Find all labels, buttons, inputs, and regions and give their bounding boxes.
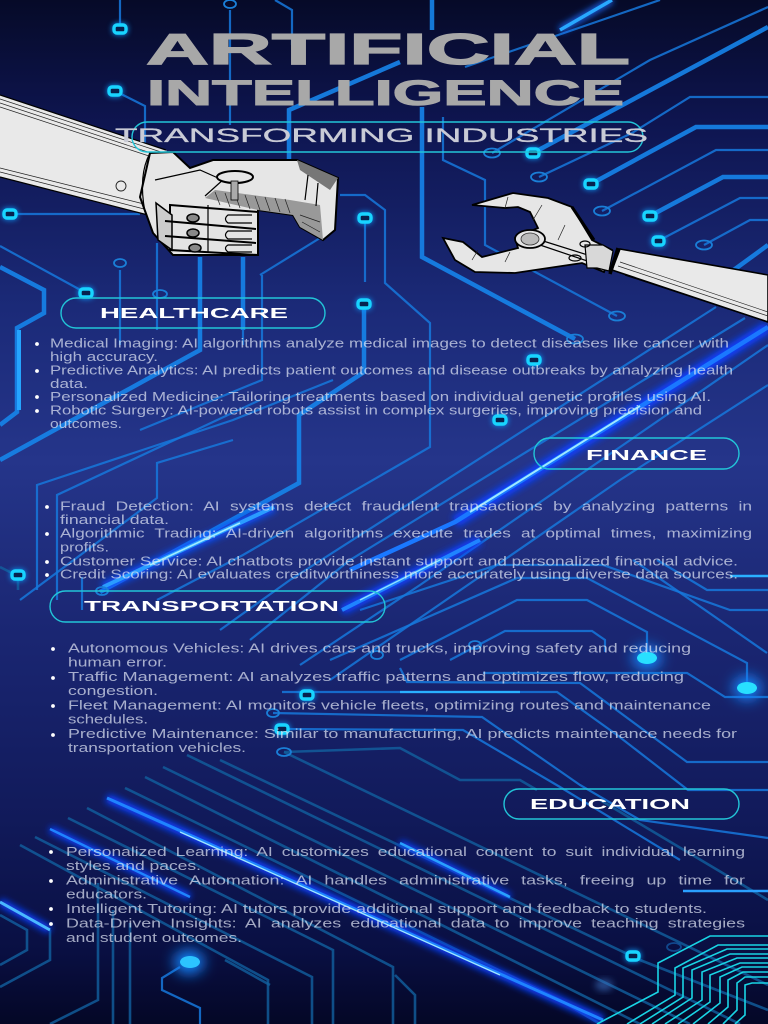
text block: transportation bullets: Fleet Management: AI monitors vehicle fleets, optimizing routes and maintenance [68, 698, 711, 712]
right gripper [443, 193, 612, 273]
text block: healthcare bullets: Robotic Surgery: AI-powered robots assist in complex surgeries, improving precision and [50, 404, 702, 418]
heading: finance [534, 438, 739, 469]
upper right fan [533, 27, 768, 153]
text block: education bullets: and student outcomes. [66, 931, 242, 945]
left hand palm and thumb [140, 152, 338, 255]
lower right diagonals [220, 307, 716, 630]
heading: finance: FINANCE [586, 447, 707, 464]
left hand finger segments [170, 205, 258, 255]
left hand pivot [217, 171, 253, 183]
subtitle pill [115, 122, 648, 152]
text block: education bullets [49, 845, 745, 945]
text block: healthcare bullets [35, 336, 733, 431]
text block: transportation bullets: Traffic Management: AI analyzes traffic patterns and optimizes flow, reducing [68, 670, 684, 684]
circuit corner: cyan lines [597, 936, 768, 1024]
text block: transportation bullets [51, 642, 737, 755]
text block: finance bullets [45, 500, 752, 582]
heading: education: EDUCATION [530, 796, 690, 813]
text block: healthcare bullets: high accuracy. [50, 350, 158, 364]
text block: transportation bullets: Predictive Maintenance: Similar to manufacturing, AI predicts maintenance needs for [68, 727, 737, 741]
text block: transportation bullets: congestion. [68, 684, 158, 698]
title: line 2: INTELLIGENCE [147, 74, 624, 113]
robot arm: right [443, 193, 768, 322]
lower left parallel diagonals [20, 845, 268, 1024]
text block: education bullets: educators. [66, 888, 147, 902]
heading: healthcare [61, 298, 325, 328]
heading: healthcare: HEALTHCARE [100, 305, 288, 322]
text block: healthcare bullets: outcomes. [50, 417, 122, 431]
text block: healthcare bullets: Predictive Analytics: AI predicts patient outcomes and disease outbreaks by analyzing health [50, 364, 733, 378]
subtitle text: TRANSFORMING INDUSTRIES [115, 125, 648, 147]
text block: transportation bullets: Autonomous Vehicles: AI drives cars and trucks, improving safety and reducing [68, 642, 691, 656]
text block: finance bullets: Customer Service: AI chatbots provide instant support and personalized financial advice. [60, 554, 738, 568]
text block: finance bullets: profits. [60, 540, 109, 554]
title: line 1: ARTIFICIAL [146, 25, 630, 74]
right gripper pivot [515, 230, 545, 248]
text block: education bullets: Intelligent Tutoring: AI tutors provide additional support and feedback to students. [66, 902, 707, 916]
title [146, 25, 630, 113]
heading: education [504, 789, 739, 819]
text block: education bullets: styles and paces. [66, 859, 201, 873]
text block: finance bullets: Credit Scoring: AI evaluates creditworthiness more accurately using diverse data sources. [60, 568, 738, 582]
text block: finance bullets: Algorithmic Trading: AI-driven algorithms execute trades at optimal times, maximizing [60, 526, 752, 540]
heading: transportation: TRANSPORTATION [84, 598, 339, 615]
text block: healthcare bullets: Medical Imaging: AI algorithms analyze medical images to detect diseases like cancer with [50, 336, 729, 350]
left arm shaft [0, 95, 175, 215]
text block: transportation bullets: human error. [68, 656, 167, 670]
text block: transportation bullets: transportation vehicles. [68, 741, 246, 755]
text block: education bullets: Administrative Automation: AI handles administrative tasks, freeing up time for [66, 874, 745, 888]
heading: transportation [50, 591, 385, 622]
text block: healthcare bullets: Personalized Medicine: Tailoring treatments based on individual genetic profiles using AI. [50, 390, 711, 404]
text block: finance bullets: financial data. [60, 513, 169, 527]
right arm shaft [612, 249, 768, 322]
text block: transportation bullets: schedules. [68, 712, 148, 726]
text block: education bullets: Personalized Learning: AI customizes educational content to suit individual learning [66, 845, 745, 859]
text block: finance bullets: Fraud Detection: AI systems detect fraudulent transactions by analyzing patterns in [60, 500, 752, 514]
robot arm: left [0, 95, 338, 255]
bottom left loops [0, 930, 50, 987]
text block: healthcare bullets: data. [50, 377, 88, 391]
text block: education bullets: Data-Driven Insights: AI analyzes educational data to improve teaching strategies [66, 916, 745, 930]
